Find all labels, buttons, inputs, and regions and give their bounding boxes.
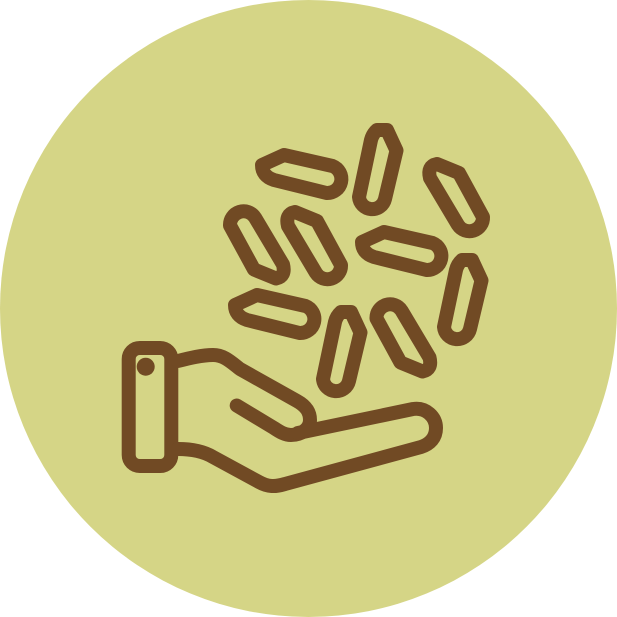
cuff button — [137, 358, 155, 376]
rice grain: middle — [362, 232, 441, 270]
rice grain: top left — [262, 155, 341, 193]
rice grain: upper right — [429, 164, 483, 231]
shirt cuff — [129, 348, 171, 466]
rice grain: right — [444, 260, 482, 339]
rice grain: lower centre — [323, 312, 360, 391]
rice grain: lower right — [376, 304, 430, 372]
icon group — [129, 130, 483, 486]
palm and fingers — [178, 409, 436, 486]
rice grain: lower left — [235, 295, 314, 333]
rice grain: top — [359, 130, 396, 209]
rice grain: centre — [287, 212, 341, 279]
hand outline — [178, 355, 310, 435]
hand — [129, 348, 436, 486]
rice grain: left — [230, 211, 284, 278]
